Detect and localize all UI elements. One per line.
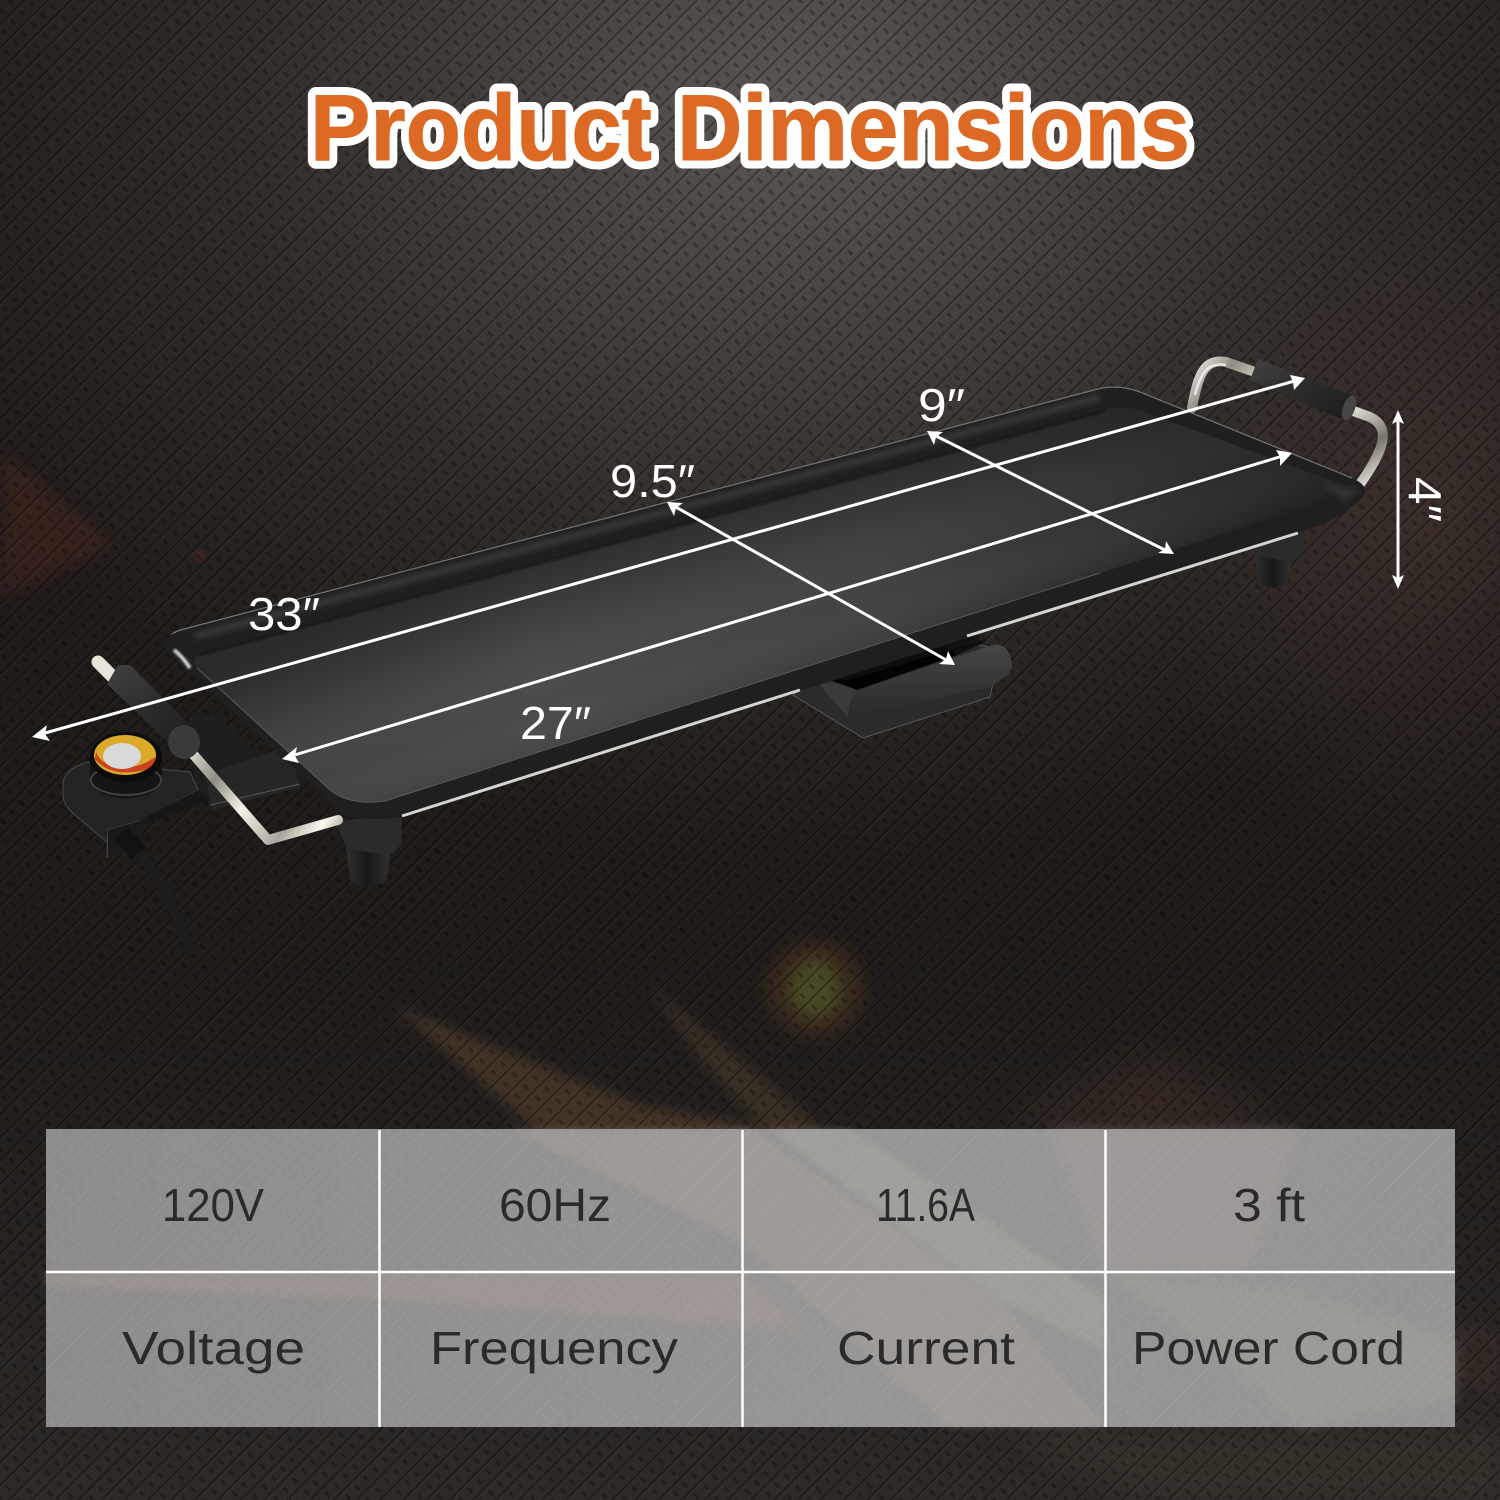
table values: 120V (162, 1179, 264, 1231)
label: 4 in: 4″ (1399, 477, 1451, 522)
dimension arrows (32, 375, 1404, 763)
griddle plate (163, 387, 1365, 819)
rim gloss (195, 397, 1100, 636)
inner shadow line (200, 411, 1105, 655)
handle: left (98, 662, 338, 840)
right corner gloss (1320, 482, 1360, 502)
label: 27 in: 27″ (520, 697, 591, 749)
dimension labels (248, 379, 1451, 749)
specification table (46, 1129, 1455, 1427)
label: 9 in: 9″ (918, 379, 965, 431)
top edge highlight (172, 387, 1352, 634)
control body (63, 762, 198, 857)
table labels: Power Cord (1132, 1322, 1405, 1374)
arrow: 4 in height (1392, 410, 1404, 589)
title: Product Dimensions (310, 75, 1190, 180)
title: Product Dimensions (310, 75, 1190, 180)
silver rim (402, 533, 1298, 816)
drawer (793, 628, 1012, 738)
table labels (122, 1322, 1405, 1374)
arrow: 27 in length (282, 450, 1292, 763)
foot: left (335, 812, 402, 887)
foot: right (1245, 528, 1306, 588)
temperature controller (63, 713, 300, 858)
arrow: 9.5 in width (667, 502, 955, 665)
table labels: Current (837, 1322, 1015, 1374)
dial face (90, 732, 162, 782)
dial body (90, 757, 162, 798)
table labels: Frequency (430, 1322, 678, 1374)
cooking surface (194, 408, 1342, 802)
label: 9.5 in: 9.5″ (610, 455, 695, 507)
corner gloss (174, 650, 190, 668)
griddle product (63, 359, 1383, 950)
table values: 60Hz (499, 1179, 611, 1231)
arrow: 9 in width (927, 431, 1174, 554)
label: 33 in: 33″ (248, 588, 320, 640)
table values: 3 ft (1233, 1179, 1305, 1231)
table values: 11.6A (876, 1179, 975, 1231)
table values (162, 1179, 1305, 1231)
cord (125, 838, 190, 950)
table labels: Voltage (122, 1322, 305, 1374)
handle: right (1192, 359, 1383, 484)
arrow: 33 in length (32, 375, 1305, 741)
bracket (187, 713, 300, 807)
